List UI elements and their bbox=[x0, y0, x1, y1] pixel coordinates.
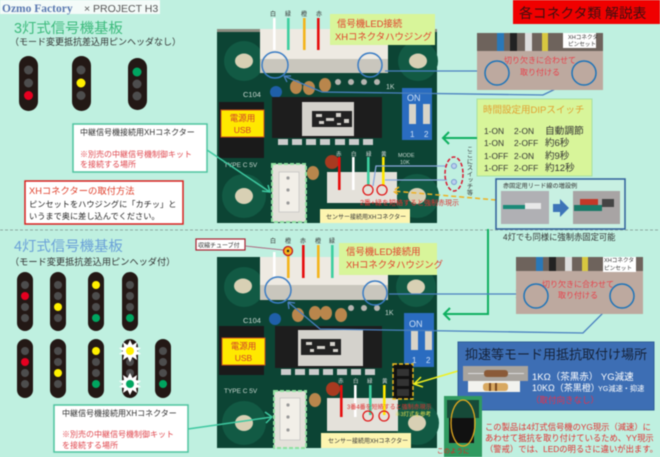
wires: LED housing, 3-light: 橙 bbox=[301, 10, 307, 18]
wires: LED housing, 4-light: 橙 bbox=[285, 237, 291, 245]
dashed arrow: forced red wiring bbox=[393, 187, 496, 200]
wires: LED housing, 3-light bbox=[270, 10, 322, 50]
pcb: 4-light board: ON bbox=[409, 319, 422, 329]
panel: DIP switch timing: 1-OFF bbox=[484, 151, 508, 161]
photo: connector notch, 3-light: 切り欠きに合わせて bbox=[504, 55, 576, 65]
heading: 4-light board: （モード変更抵抗差込用ピンヘッダ付） bbox=[10, 256, 175, 267]
wires: sensor, 3-light: 白 bbox=[351, 150, 357, 158]
green vertical connector line bbox=[444, 229, 488, 320]
label: shrink tube: 収縮チューブ付 bbox=[198, 242, 240, 250]
label: LED housing, 3-light: XHコネクタハウジング bbox=[335, 31, 432, 42]
panel: DIP switch timing bbox=[477, 99, 592, 176]
panel: DIP switch timing: 1-ON bbox=[484, 138, 504, 148]
photo: connector notch, 3-light: 取り付ける bbox=[520, 67, 560, 77]
pcb: 3-light board: 10K bbox=[400, 160, 410, 166]
panel: DIP switch timing: 約6秒 bbox=[545, 137, 570, 149]
wires: LED housing, 4-light: 橙 bbox=[315, 237, 321, 245]
pcb: 3-light board: 1 bbox=[410, 130, 415, 139]
panel: DIP switch timing: 1-ON bbox=[484, 126, 504, 136]
blue circles and leader lines, 4-light bbox=[265, 277, 610, 333]
callout: XH connector mounting bbox=[25, 181, 183, 224]
heading: 3-light board bbox=[10, 20, 181, 47]
wires: sensor, 3-light bbox=[336, 150, 387, 195]
label: sensor connector, 3-light bbox=[320, 209, 410, 223]
wires: LED housing, 4-light: 白 bbox=[270, 237, 276, 245]
note: forced red, 3-light: 2番+緑を短絡すると強制赤現示 bbox=[360, 198, 459, 207]
note: forced red, 4-light: 3番4番を短絡すると強制赤現示 bbox=[347, 403, 432, 411]
label: LED housing, 4-light: XHコネクタハウジング bbox=[346, 259, 443, 270]
wires: sensor, 4-light: 赤 bbox=[338, 377, 344, 385]
pcb: 4-light board: 2 bbox=[426, 356, 431, 365]
label: USB power, 4-light: USB bbox=[235, 353, 253, 363]
panel: mode resistor bbox=[458, 342, 654, 410]
pcb: 4-light board bbox=[217, 257, 439, 448]
pcb: 3-light board: TYPE C 5V bbox=[224, 162, 258, 169]
heading: 4-light board bbox=[10, 238, 175, 267]
panel: DIP switch timing: 約9秒 bbox=[545, 150, 570, 162]
pcb: 3-light board: 1K bbox=[386, 84, 395, 91]
label: LED housing, 3-light: 信号機LED接続 bbox=[337, 18, 403, 29]
pcb: 4-light board: TYPE C 5V bbox=[224, 388, 258, 395]
arrow: DIP to switch, 3-light bbox=[443, 132, 477, 144]
panel: DIP switch timing: 自動調節 bbox=[545, 124, 584, 137]
label: sensor connector, 4-light: センサー接続用XHコネクター bbox=[328, 437, 408, 445]
panel: mode resistor: 1KΩ（茶黒赤） YG減速 bbox=[532, 371, 634, 383]
switch terminals callout: ここにスイッチ等 bbox=[466, 146, 473, 196]
panel: DIP switch timing: 2-ON bbox=[514, 151, 534, 161]
wires: sensor, 4-light bbox=[338, 377, 389, 421]
photo: connector notch, 4-light: XHコネクタ bbox=[604, 256, 634, 264]
heading: 3-light board: 3灯式信号機基板 bbox=[14, 20, 123, 37]
panel: mode resistor: （取付向きなし） bbox=[531, 395, 599, 405]
pcb: 3-light board: MODE bbox=[398, 153, 415, 159]
label: USB power, 3-light bbox=[221, 110, 264, 137]
wires: LED housing, 3-light: 赤 bbox=[316, 11, 322, 18]
label: LED housing, 4-light bbox=[339, 243, 443, 275]
label: USB power, 3-light: USB bbox=[234, 125, 252, 135]
label: USB power, 4-light bbox=[222, 338, 265, 365]
panel: mode resistor: 10KΩ（茶黒橙） bbox=[532, 382, 600, 393]
photo: resistor example bbox=[437, 396, 482, 457]
signals: 3-light bbox=[19, 56, 147, 111]
callout: relay connector, 3-light: ※別売の中継信号機制御キット bbox=[80, 149, 192, 159]
header brand bbox=[0, 0, 160, 15]
callout: relay connector, 4-light: を接続する場所 bbox=[62, 440, 118, 450]
wires: sensor, 3-light: 黄 bbox=[381, 150, 387, 158]
wires: sensor, 4-light: 緑 bbox=[367, 377, 373, 385]
header brand: × PROJECT H3 bbox=[84, 3, 158, 15]
pcb: 3-light board: ON bbox=[407, 93, 420, 103]
note: YY brightness bbox=[485, 422, 658, 454]
photo: connector notch, 4-light: ピンセット bbox=[604, 265, 632, 272]
pcb: 4-light board: 1K bbox=[385, 310, 394, 317]
label: sensor connector, 3-light: センサー接続用XHコネクター bbox=[326, 213, 406, 221]
signals: 4-light row 1 bbox=[17, 272, 138, 331]
note: YY brightness: あわせて抵抗を取り付けているため、YY現示 bbox=[485, 433, 654, 443]
panel: mode resistor: YG減速・抑速 bbox=[598, 384, 644, 393]
photo: connector notch, 4-light: 取り付ける bbox=[558, 290, 598, 300]
arrows: relay connector leaders bbox=[188, 150, 272, 429]
header brand: Ozmo Factory bbox=[2, 3, 73, 15]
panel: DIP switch timing: 2-OFF bbox=[514, 163, 538, 173]
panel: DIP switch timing: 約12秒 bbox=[545, 162, 575, 174]
panel: DIP switch timing: 1-OFF bbox=[484, 163, 508, 173]
callout: relay connector, 4-light: ※別売の中継信号機制御キット bbox=[62, 429, 174, 439]
label: USB power, 4-light: 電源用 bbox=[231, 341, 256, 351]
connector: relay, 3-light bbox=[272, 164, 306, 222]
switch terminals callout bbox=[445, 146, 473, 196]
label: LED housing, 3-light bbox=[330, 14, 435, 45]
callout: relay connector, 3-light: 中継信号機接続用XHコネクター bbox=[80, 127, 195, 137]
callout: relay connector, 3-light: を接続する場所 bbox=[80, 159, 136, 169]
callout: relay connector, 3-light bbox=[73, 124, 207, 172]
photo: connector notch, 3-light: XHコネクタ bbox=[568, 33, 598, 41]
pcb: 3-light board: C104 bbox=[243, 90, 261, 99]
connector: sensor, 3-light bbox=[327, 172, 397, 203]
label: shrink tube bbox=[196, 239, 245, 250]
callout: relay connector, 4-light: 中継信号機接続用XHコネクター bbox=[62, 408, 177, 418]
wires: LED housing, 3-light: 緑 bbox=[285, 10, 291, 18]
pcb: 3-light board bbox=[217, 29, 439, 223]
panel: lead wire example bbox=[496, 179, 625, 229]
callout: XH connector mounting: XHコネクターの取付方法 bbox=[29, 185, 135, 196]
note: 4-light same: 4灯でも同様に強制赤固定可能 bbox=[503, 232, 616, 242]
panel: DIP switch timing: 時間設定用DIPスイッチ bbox=[483, 105, 584, 116]
panel: title bbox=[513, 0, 660, 24]
signals: 4-light row 2 bbox=[17, 339, 171, 398]
wires: sensor, 4-light: 白 bbox=[353, 377, 359, 385]
heading: 3-light board: （モード変更抵抗差込用ピンヘッダなし） bbox=[10, 36, 181, 47]
wires: LED housing, 4-light bbox=[245, 237, 335, 278]
note: forced red, 4-light: ※3灯式を参考 bbox=[395, 410, 432, 418]
connector: sensor, 4-light bbox=[327, 398, 398, 431]
pcb: 4-light board: C104 bbox=[243, 316, 261, 325]
label: USB power, 3-light: 電源用 bbox=[230, 113, 255, 123]
connector: relay, 4-light bbox=[274, 391, 306, 448]
wires: LED housing, 4-light: 赤 bbox=[300, 238, 306, 245]
callout: XH connector mounting: いうまで奥に差し込んでください。 bbox=[29, 211, 160, 221]
note: YY brightness: この製品は4灯式信号機のYG現示（減速）に bbox=[485, 422, 651, 432]
photo: connector notch, 3-light: ピンセット bbox=[568, 41, 596, 48]
photo: connector notch, 4-light: 切り欠きに合わせて bbox=[542, 279, 614, 289]
panel: DIP switch timing: 2-ON bbox=[514, 126, 534, 136]
callout: relay connector, 4-light bbox=[54, 405, 188, 452]
panel: mode resistor: 抑速等モード用抵抗取付け場所 bbox=[465, 347, 647, 362]
photo: resistor example: このように bbox=[437, 447, 470, 455]
label: sensor connector, 4-light bbox=[321, 433, 411, 448]
blue circles and leader lines, 3-light bbox=[262, 52, 572, 186]
wires: sensor, 3-light: 赤 bbox=[336, 150, 342, 158]
wires: sensor, 4-light: 黄 bbox=[382, 377, 388, 385]
pcb: 3-light board: 2 bbox=[424, 130, 429, 139]
wires: sensor, 3-light: 緑 bbox=[366, 150, 372, 158]
panel: title: 各コネクタ類 解説表 bbox=[519, 6, 647, 21]
wires: LED housing, 4-light: 緑 bbox=[329, 237, 335, 245]
panel: DIP switch timing: 2-OFF bbox=[514, 138, 538, 148]
label: LED housing, 4-light: 信号機LED接続用 bbox=[346, 246, 420, 257]
pin header: mode resistor bbox=[393, 364, 413, 399]
arrow: yellow pointer to header bbox=[414, 371, 458, 387]
pcb: 4-light board: 1 bbox=[412, 356, 417, 365]
heading: 4-light board: 4灯式信号機基板 bbox=[14, 238, 123, 255]
photo: connector notch, 4-light bbox=[516, 256, 643, 314]
wires: LED housing, 3-light: 白 bbox=[270, 10, 276, 18]
note: forced red, 4-light bbox=[347, 403, 432, 418]
photo: connector notch, 3-light bbox=[477, 33, 603, 90]
note: YY brightness: （警戒）では、LEDの明るさに違いが出ます。 bbox=[485, 444, 658, 454]
callout: XH connector mounting: ピンセットをハウジングに「カチッ」と bbox=[29, 199, 176, 209]
panel: lead wire example: 赤固定用リード線の増設例 bbox=[503, 182, 577, 190]
